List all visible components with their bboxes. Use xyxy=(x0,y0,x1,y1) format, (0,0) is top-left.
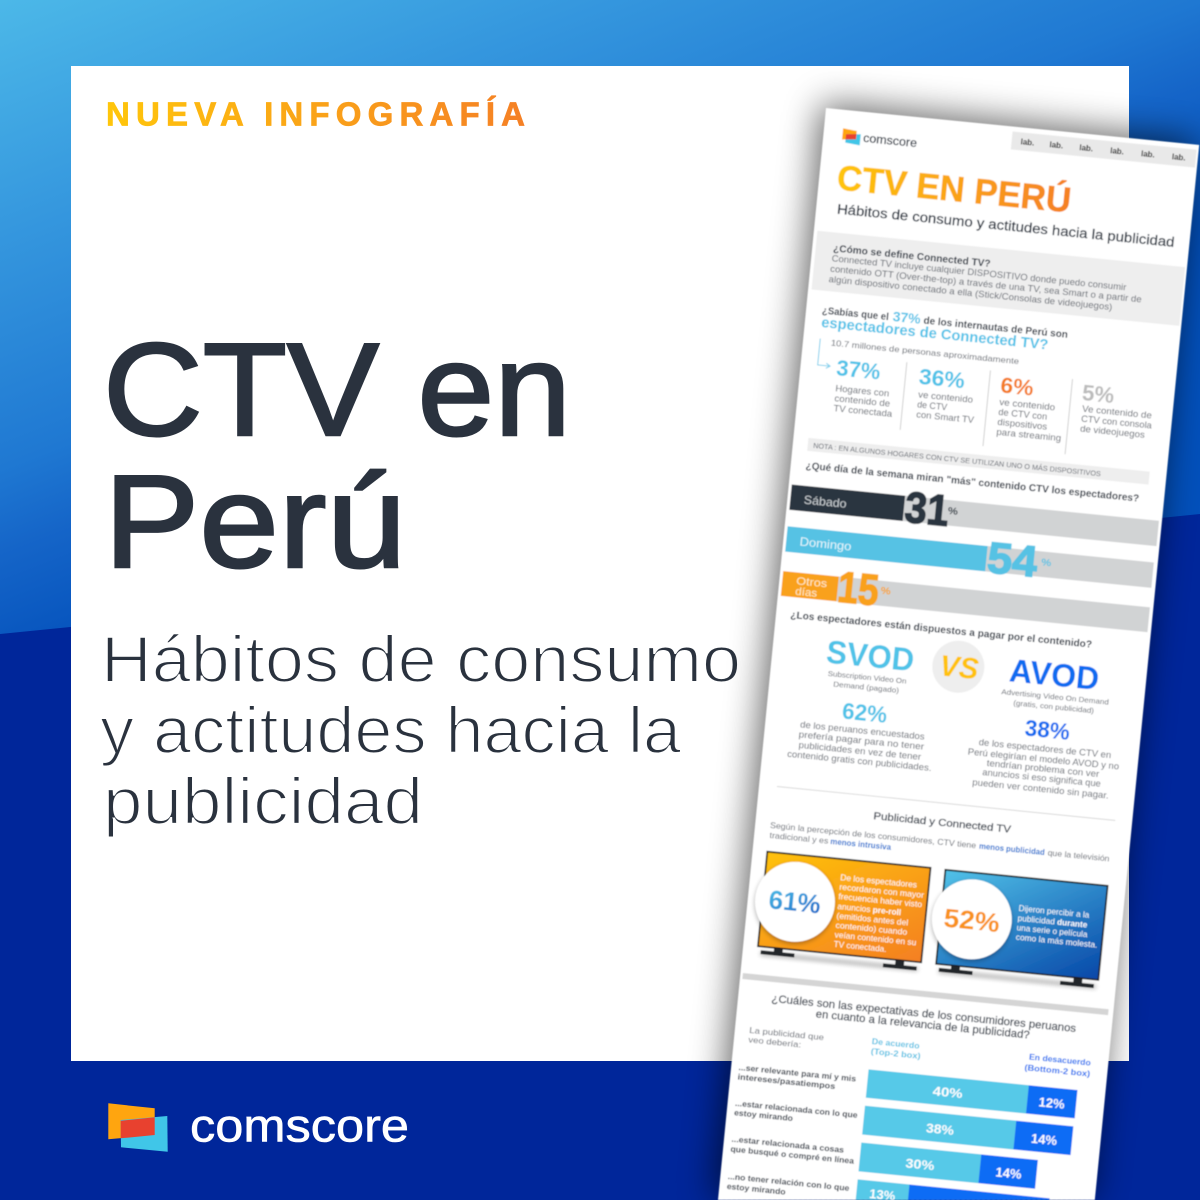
arrow: to 37% xyxy=(817,339,833,369)
text: ad perception: que la televisión xyxy=(1047,847,1110,864)
partner logos strip: lab. xyxy=(1171,152,1186,163)
heading: 37% internautas: 10.7 millones de personas aproximadamente xyxy=(830,338,1020,366)
icon: comscore mark xyxy=(108,1103,168,1152)
stat: 36%: 36% xyxy=(918,364,966,393)
panel: AVOD xyxy=(964,649,1129,802)
text: ad perception: tradicional y es xyxy=(769,830,829,846)
partner logos strip: lab. xyxy=(1020,137,1035,148)
heading: publicidad y connected tv: Publicidad y Connected TV xyxy=(873,810,1011,836)
badge: VS xyxy=(930,638,987,695)
bar: Otros días: % xyxy=(880,586,891,598)
panel: TV 61%: veían contenido en su xyxy=(834,929,917,947)
circle: 52% xyxy=(928,876,1016,965)
panel: AVOD: pueden ver contenido sin pagar. xyxy=(972,777,1109,802)
panel: TV 52%: como la más molesta. xyxy=(1015,932,1098,950)
main title: CTV en xyxy=(103,316,571,463)
wordmark: comscore xyxy=(190,1100,409,1152)
comscore logo xyxy=(108,1100,409,1152)
bar: Sábado xyxy=(788,472,960,537)
note strip xyxy=(807,438,1150,485)
panel: SVOD: Demand (pagado) xyxy=(833,680,900,695)
panel: AVOD: AVOD xyxy=(1008,652,1101,697)
legend: de acuerdo: De acuerdo xyxy=(871,1036,920,1051)
text: ad perception: menos publicidad xyxy=(979,841,1045,857)
partner logos strip: lab. xyxy=(1110,146,1124,157)
panel: definition: algún dispositivo conectado a ella (Stick/Consolas de videojuegos) xyxy=(828,274,1113,312)
row: no tener relación xyxy=(726,1167,1050,1200)
bar: Sábado: % xyxy=(947,506,958,518)
stat: 5%: Ve contenido de xyxy=(1082,404,1152,421)
panel: TV 61%: (emitidos antes del xyxy=(836,910,909,928)
bar: Sábado: 31 xyxy=(903,483,951,536)
row: relacionada con lo que estoy mirando xyxy=(733,1093,1073,1155)
TV stands xyxy=(938,963,1097,989)
stat: 37%: 37% xyxy=(835,355,881,385)
subtitle: Hábitos de consumo xyxy=(101,622,741,696)
circle: 52%: 52% xyxy=(942,903,1001,938)
panel: AVOD: 38% xyxy=(1024,715,1071,745)
stats row xyxy=(830,355,1156,462)
panel: SVOD: contenido gratis con publicidades. xyxy=(787,749,932,774)
panel: SVOD xyxy=(787,631,944,774)
note strip: NOTA : EN ALGUNOS HOGARES CON CTV SE UTILIZAN UNO O MÁS DISPOSITIVOS xyxy=(813,441,1102,478)
stat: 5% xyxy=(1078,380,1156,441)
panel: TV 61% xyxy=(750,851,931,971)
bar: Sábado: Sábado xyxy=(803,493,848,511)
panel: SVOD: SVOD xyxy=(825,634,916,678)
sheet shadow xyxy=(714,104,1195,1200)
panel: TV 61%: De los espectadores xyxy=(840,872,917,890)
panel: SVOD: Subscription Video On xyxy=(827,669,907,686)
row: relacionada a cosas xyxy=(730,1130,1038,1189)
partner logos strip: lab. xyxy=(1141,149,1155,160)
stat: 5%: CTV con consola xyxy=(1081,414,1152,431)
heading: expectations: en cuanto a la relevancia de la publicidad? xyxy=(815,1008,1030,1042)
bar: Otros días: días xyxy=(795,586,818,600)
bar: Otros días xyxy=(780,557,893,617)
row: relacionada con lo que estoy mirando: estoy mirando xyxy=(734,1107,793,1123)
row: relacionada a cosas: 14% xyxy=(995,1164,1023,1182)
legend: de acuerdo: (Top-2 box) xyxy=(870,1046,921,1061)
stat: 36%: ve contenido xyxy=(918,389,973,405)
panel: definition: contenido OTT (Over-the-top) a través de una TV, sea Smart o a partir de xyxy=(830,264,1142,304)
legend: de acuerdo xyxy=(870,1036,922,1061)
bar: Domingo: % xyxy=(1041,557,1052,569)
stat: 37%: contenido de xyxy=(834,393,891,409)
row: relacionada a cosas: 30% xyxy=(905,1155,936,1173)
legend: en desacuerdo xyxy=(1024,1051,1092,1079)
panel: AVOD: tendrían problema con ver xyxy=(986,758,1100,780)
heading: expectations: ¿Cuáles son las expectativas de los consumidores peruanos xyxy=(771,993,1077,1035)
stat: 36% xyxy=(915,364,979,425)
stat: 37% xyxy=(832,355,897,419)
row: relacionada a cosas: que busqué o compré en línea xyxy=(730,1144,855,1166)
partner logos strip: lab. xyxy=(1079,143,1093,153)
panel: TV 52%: Dijeron percibir a la xyxy=(1018,903,1090,920)
panel: TV 61%: contenido) cuando xyxy=(835,920,908,937)
panel: SVOD: de los peruanos encuestados xyxy=(800,719,925,743)
bar: Otros días: Otros xyxy=(796,575,828,590)
stat: 6% xyxy=(995,373,1067,443)
heading: 37% internautas: de los internautas de Perú son xyxy=(923,316,1068,341)
white card xyxy=(71,66,1129,1061)
row: relevante: 12% xyxy=(1038,1094,1066,1112)
text: ad perception: Según la percepción de los consumidores, CTV tiene xyxy=(770,820,977,850)
legend: en desacuerdo: En desacuerdo xyxy=(1029,1052,1091,1068)
bar chart: day of week xyxy=(780,472,1160,642)
panel: SVOD: prefería pagar para no tener xyxy=(798,729,925,753)
heading: 37% internautas: espectadores de Connected TV? xyxy=(821,314,1049,353)
heading: 37% internautas: 37% xyxy=(892,308,922,327)
stat: 36%: de CTV xyxy=(917,399,948,412)
panel: TV 52%: publicidad durante xyxy=(1017,913,1088,930)
row: relacionada con lo que estoy mirando: 14% xyxy=(1030,1131,1058,1148)
panel: AVOD: Perú elegirían el modelo AVOD y no xyxy=(967,747,1120,773)
infographic sheet xyxy=(718,108,1199,1200)
heading: pay for content: ¿Los espectadores están dispuestos a pagar por el contenido? xyxy=(790,610,1092,651)
text: la publicidad que veo debería xyxy=(748,1025,825,1052)
main title xyxy=(103,316,571,595)
row: relacionada a cosas: ...estar relacionada a cosas xyxy=(731,1134,845,1155)
sheet title: CTV EN PERÚ xyxy=(835,158,1073,220)
row: no tener relación: ...no tener relación con lo que xyxy=(727,1171,850,1193)
circle: 61% xyxy=(751,858,839,948)
stat: 6%: dispositivos xyxy=(997,417,1048,432)
subtitle: publicidad xyxy=(103,764,423,838)
panel: AVOD: Advertising Video On Demand xyxy=(1001,687,1109,707)
row: relevante xyxy=(737,1057,1078,1118)
row: relacionada con lo que estoy mirando: ...estar relacionada con lo que xyxy=(735,1098,858,1120)
panel: TV 61%: frecuencia haber visto xyxy=(838,891,923,909)
stat: 6%: ve contenido xyxy=(999,397,1056,412)
text: la publicidad que veo debería: La publicidad que xyxy=(749,1025,825,1042)
stat: 37%: Hogares con xyxy=(835,383,890,399)
panel: TV 61%: recordaron con mayor xyxy=(839,882,925,900)
text: ad perception: menos intrusiva xyxy=(830,836,892,852)
icon: small comscore mark xyxy=(842,128,861,145)
panel: SVOD: 62% xyxy=(841,698,888,728)
text: la publicidad que veo debería: veo debería: xyxy=(748,1034,802,1050)
heading: day of week: ¿Qué día de la semana miran "más" contenido CTV los espectadores? xyxy=(805,461,1140,505)
stat: 36%: con Smart TV xyxy=(916,409,974,425)
row: relevante: intereses/pasatiempos xyxy=(737,1072,836,1091)
stat: 5%: de videojuegos xyxy=(1080,424,1146,440)
subtitle xyxy=(100,622,741,838)
partner logos strip: lab. xyxy=(1049,140,1064,151)
panel: definition: ¿Cómo se define Connected TV? xyxy=(833,243,991,270)
panel: AVOD: anuncios si eso significa que xyxy=(982,767,1101,790)
stat: 6%: para streaming xyxy=(996,427,1062,443)
sheet subtitle: Hábitos de consumo y actitudes hacia la publicidad xyxy=(836,202,1175,250)
eyebrow: nueva infografía: NUEVA INFOGRAFÍA xyxy=(106,96,525,132)
sheet logo xyxy=(842,128,918,151)
badge: VS: VS xyxy=(938,649,980,686)
panel: TV 52% xyxy=(926,869,1108,989)
bar: Domingo: 54 xyxy=(985,533,1040,587)
stat: 5%: 5% xyxy=(1081,380,1115,408)
bar: Otros días: 15 xyxy=(835,563,881,615)
sheet wordmark: comscore xyxy=(863,131,918,150)
panel: SVOD: publicidades en vez de tener xyxy=(798,740,922,763)
panel: AVOD: (gratis, con publicidad) xyxy=(1013,698,1095,715)
row: relacionada con lo que estoy mirando: 38% xyxy=(925,1120,955,1138)
stat: 6%: de CTV con xyxy=(998,407,1048,422)
heading: 37% internautas xyxy=(818,301,1069,371)
partner logos strip xyxy=(1011,131,1197,168)
stat: 37%: TV conectada xyxy=(833,403,893,419)
panel: TV 52%: una serie o película xyxy=(1016,922,1088,939)
main title: Perú xyxy=(104,448,406,595)
text: ad perception xyxy=(769,820,1110,874)
stat: 6%: 6% xyxy=(999,373,1035,401)
row: no tener relación: estoy mirando xyxy=(726,1181,786,1197)
panel: AVOD: de los espectadores de CTV en xyxy=(978,737,1112,761)
TV stands xyxy=(760,946,918,971)
panel: TV 61%: anuncios pre-roll xyxy=(837,901,902,917)
bar: Domingo: Domingo xyxy=(799,535,852,554)
panel: definition: Connected TV incluye cualquier DISPOSITIVO donde puedo consumir xyxy=(831,253,1127,292)
subtitle: y actitudes hacia la xyxy=(100,693,681,767)
panel: TV 61%: TV conectada. xyxy=(833,939,887,954)
row: relevante: 40% xyxy=(932,1083,964,1101)
legend: en desacuerdo: (Bottom-2 box) xyxy=(1024,1062,1091,1079)
panel: definition xyxy=(812,231,1185,326)
circle: 61%: 61% xyxy=(767,884,822,919)
row: relevante: ...ser relevante para mí y mis xyxy=(738,1062,857,1084)
bar: Domingo xyxy=(784,513,1054,588)
heading: 37% internautas: ¿Sabías que el xyxy=(821,306,889,323)
